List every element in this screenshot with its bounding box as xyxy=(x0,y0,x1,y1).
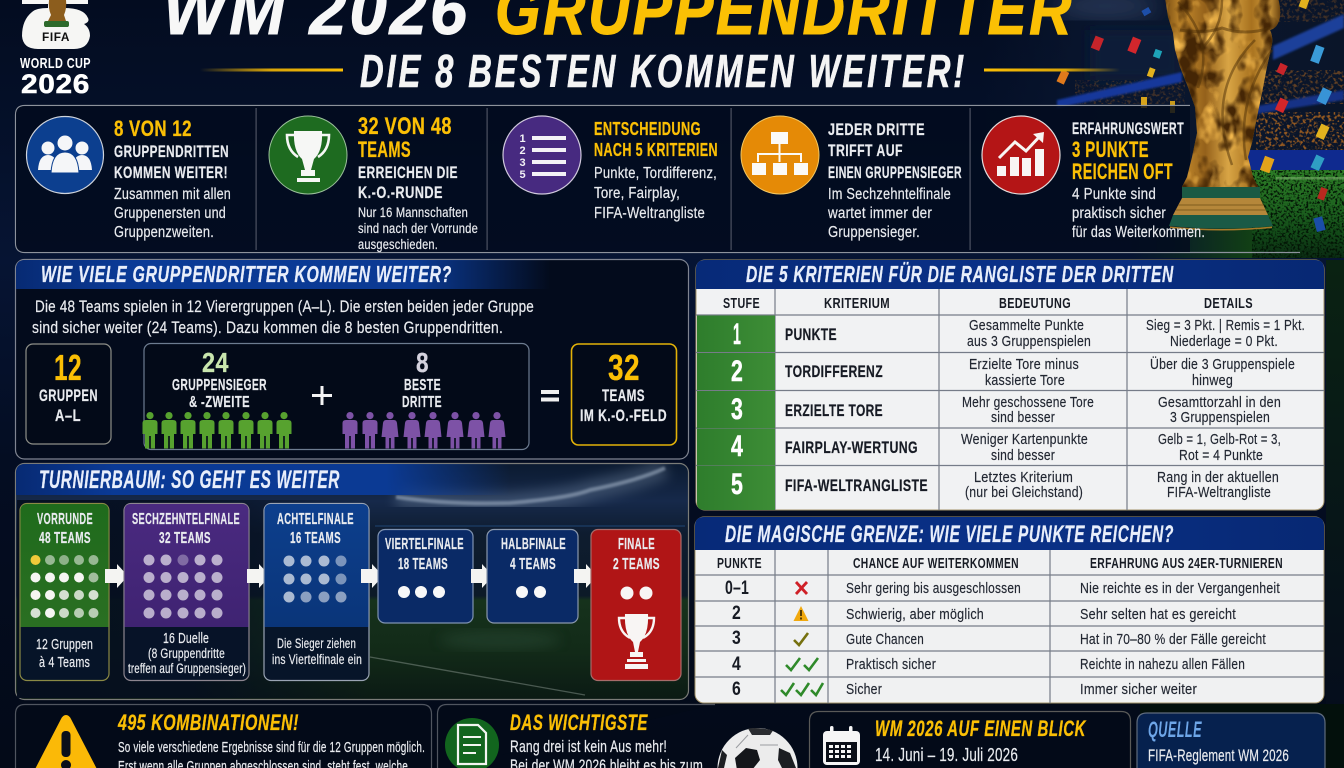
stage: Vorrunde: à 4 Teams xyxy=(39,655,90,671)
row 4: sind besser xyxy=(991,448,1055,464)
stage: Sechzehntelfinale: SECHZEHNTELFINALE xyxy=(132,511,240,528)
fact: Gruppensieger: Im Sechzehntelfinale xyxy=(828,186,951,203)
stat: 24 plus 8: 8 xyxy=(416,347,429,378)
row 1: Gesammelte Punkte xyxy=(969,318,1084,334)
stat: 32 teams: TEAMS xyxy=(602,387,645,405)
row 6: 6 xyxy=(732,679,741,700)
fact: Erfahrungswert: 3 PUNKTE xyxy=(1072,137,1149,162)
stage: Achtelfinale: 16 TEAMS xyxy=(290,530,341,547)
row 2: Schwierig, aber möglich xyxy=(846,607,984,623)
row 3: 3 xyxy=(732,628,741,649)
stat: 32 teams: IM K.-O.-FELD xyxy=(580,407,667,425)
stat: 32 teams: 32 xyxy=(608,347,640,388)
fact: 8 von 12: GRUPPENDRITTEN xyxy=(114,143,229,161)
icon: trophy xyxy=(619,614,654,669)
stage: Sechzehntelfinale: (8 Gruppendritte xyxy=(148,646,225,661)
plus sign xyxy=(312,386,332,405)
icon: purple team figures xyxy=(342,412,506,448)
stage: Viertelfinale xyxy=(378,530,473,623)
row 4 xyxy=(732,654,1245,675)
row 4: Reichte in nahezu allen Fällen xyxy=(1080,657,1245,673)
fact: 32 von 48: ERREICHEN DIE xyxy=(358,164,458,182)
panel: WM 2026 auf einen Blick xyxy=(810,712,1130,768)
fact: 32 von 48: K.-O.-RUNDE xyxy=(358,184,443,202)
fact: Gruppensieger: Gruppensieger. xyxy=(828,224,920,241)
row 4: FAIRPLAY-WERTUNG xyxy=(785,439,918,457)
row 1 xyxy=(697,316,1305,352)
table header xyxy=(723,296,1253,312)
table header: CHANCE AUF WEITERKOMMEN xyxy=(853,556,1019,572)
logo wordmark: FIFA xyxy=(42,30,70,44)
row 2: hinweg xyxy=(1192,373,1233,389)
fact: 8 von 12: 8 VON 12 xyxy=(114,116,192,141)
icon: three checks xyxy=(781,683,823,695)
row 0-1: 0–1 xyxy=(725,578,749,599)
stage: Vorrunde xyxy=(20,504,109,680)
row 5: Rang in der aktuellen xyxy=(1157,470,1279,486)
icon: FIFA World Cup logo xyxy=(20,0,91,99)
row 3: Mehr geschossene Tore xyxy=(962,395,1094,411)
fact: 5 Kriterien: Punkte, Tordifferenz, xyxy=(594,165,717,182)
stage: Finale xyxy=(591,530,681,680)
stat: 24 plus 8: DRITTE xyxy=(402,394,442,411)
fact: 8 von 12: KOMMEN WEITER! xyxy=(114,164,228,182)
fact: 8 von 12 xyxy=(26,116,231,241)
row 1: Niederlage = 0 Pkt. xyxy=(1170,334,1278,350)
stage: Finale: FINALE xyxy=(618,536,655,553)
panel: Das Wichtigste xyxy=(438,704,715,768)
team dots xyxy=(30,555,98,618)
row 4: 4 xyxy=(731,430,743,463)
stage: Halbfinale xyxy=(487,530,578,623)
row 2: 2 xyxy=(732,603,741,624)
arrow xyxy=(105,564,128,588)
row 4: 4 xyxy=(732,654,741,675)
icon: olive check xyxy=(794,633,808,645)
row 2 xyxy=(697,353,1295,390)
stadium lights xyxy=(17,468,685,698)
stage: Viertelfinale: 18 TEAMS xyxy=(398,556,448,573)
stage: Achtelfinale: Die Sieger ziehen xyxy=(277,636,356,651)
fact: 32 von 48 xyxy=(269,113,478,252)
icon: green team figures xyxy=(142,412,292,448)
row 3: ERZIELTE TORE xyxy=(785,402,883,420)
panel: Quelle: QUELLE xyxy=(1148,717,1202,742)
team dots xyxy=(284,556,346,602)
stat: 12 groups xyxy=(26,344,111,444)
row 3: 3 xyxy=(731,393,743,426)
row 3 xyxy=(697,391,1281,428)
row 1: aus 3 Gruppenspielen xyxy=(967,334,1091,350)
panel: 495 Kombinationen: 495 KOMBINATIONEN! xyxy=(117,710,299,735)
panel: key facts xyxy=(16,106,1300,252)
icon: calendar xyxy=(823,726,860,765)
stat: 12 groups: 12 xyxy=(54,347,82,388)
row 3: 3 Gruppenspielen xyxy=(1170,410,1270,426)
icon: two checks xyxy=(786,658,818,670)
fact: Gruppensieger: JEDER DRITTE xyxy=(828,121,925,139)
fact: Erfahrungswert: REICHEN OFT xyxy=(1072,159,1173,184)
fact: Gruppensieger: TRIFFT AUF xyxy=(828,142,903,160)
stage: Sechzehntelfinale: 16 Duelle xyxy=(163,631,209,647)
panel: magische Grenze table xyxy=(695,517,1324,703)
heading: WIE VIELE GRUPPENDRITTER KOMMEN WEITER? xyxy=(41,261,452,287)
row 3: Gesamttorzahl in den xyxy=(1158,395,1281,411)
stat: 24 plus 8: BESTE xyxy=(404,377,441,394)
row 3: sind besser xyxy=(991,410,1055,426)
row 2 xyxy=(732,603,1236,624)
icon: warning triangle xyxy=(32,715,100,768)
icon: rising chart xyxy=(982,116,1060,194)
fact: 32 von 48: Nur 16 Mannschaften xyxy=(358,205,468,220)
table header: PUNKTE xyxy=(717,556,762,572)
arrow xyxy=(574,564,597,588)
arrow xyxy=(247,564,270,588)
stage: Vorrunde: 48 TEAMS xyxy=(39,530,91,547)
icon: numbered list: 1 xyxy=(520,133,526,145)
stat: 24 plus 8: GRUPPENSIEGER xyxy=(172,377,267,394)
stage: Viertelfinale: VIERTELFINALE xyxy=(385,536,464,553)
row 1: PUNKTE xyxy=(785,326,837,344)
row 6 xyxy=(732,679,1197,700)
icon: numbered list xyxy=(503,116,581,194)
stat: 24 plus 8: 24 xyxy=(202,347,229,378)
icon: warning xyxy=(794,606,808,621)
fact: 32 von 48: 32 VON 48 xyxy=(358,113,452,140)
fact: 5 Kriterien: Tore, Fairplay, xyxy=(594,185,680,202)
fact text over trophy: für das Weiterkommen. xyxy=(1072,224,1205,241)
row 4: Gelb = 1, Gelb-Rot = 3, xyxy=(1158,432,1281,448)
stat: 32 teams xyxy=(572,344,676,445)
row 4 xyxy=(697,428,1281,466)
row 5: (nur bei Gleichstand) xyxy=(965,485,1083,501)
icon: group of people xyxy=(26,116,104,194)
row 1: Sieg = 3 Pkt. | Remis = 1 Pkt. xyxy=(1146,318,1305,334)
row 4: Praktisch sicher xyxy=(846,657,936,673)
stage: Halbfinale: HALBFINALE xyxy=(501,536,566,553)
panel: 495 Kombinationen xyxy=(16,704,432,768)
icon: numbered list: 3 xyxy=(520,157,526,169)
row 2: 2 xyxy=(731,355,743,388)
fact: Erfahrungswert xyxy=(982,116,1184,222)
panel: Quelle xyxy=(1137,713,1325,768)
panel: Das Wichtigste: Rang drei ist kein Aus mehr! xyxy=(510,738,667,756)
title xyxy=(163,0,1074,49)
intro text: sind sicher weiter (24 Teams). Dazu kommen die 8 besten Gruppendritten. xyxy=(32,319,503,337)
fact: Erfahrungswert: praktisch sicher xyxy=(1072,205,1166,222)
table header: STUFE xyxy=(723,296,760,312)
row 0-1: Nie reichte es in der Vergangenheit xyxy=(1080,581,1280,597)
fact: Gruppensieger xyxy=(741,116,962,241)
icon: World Cup trophy xyxy=(1165,0,1280,230)
panel: Turnierbaum xyxy=(16,464,688,700)
table header xyxy=(717,556,1283,572)
table header: DETAILS xyxy=(1204,296,1253,312)
fact: 8 von 12: Zusammen mit allen xyxy=(114,186,231,203)
panel: 5 Kriterien table xyxy=(696,260,1324,510)
fact: 5 Kriterien xyxy=(503,116,718,222)
stage: Achtelfinale: ins Viertelfinale ein xyxy=(272,652,362,667)
row 5: Letztes Kriterium xyxy=(974,470,1073,486)
icon: bracket tree xyxy=(741,116,819,194)
row 4: Weniger Kartenpunkte xyxy=(961,432,1088,448)
row 5: 5 xyxy=(731,468,743,501)
fact: 32 von 48: sind nach der Vorrunde xyxy=(358,221,478,236)
icon: numbered list: 2 xyxy=(520,145,526,157)
icon: FIFA World Cup logo: 2026 xyxy=(21,69,90,99)
stage: Sechzehntelfinale: treffen auf Gruppensieger) xyxy=(128,661,246,676)
fact: 32 von 48: TEAMS xyxy=(358,137,411,162)
row 5 xyxy=(697,466,1279,510)
row 4: Rot = 4 Punkte xyxy=(1179,448,1263,464)
fact: 8 von 12: Gruppenersten und xyxy=(114,205,226,222)
row 3: Gute Chancen xyxy=(846,632,924,648)
table header: KRITERIUM xyxy=(824,296,890,312)
fact: 5 Kriterien: FIFA-Weltrangliste xyxy=(594,205,705,222)
icon: FIFA World Cup logo: WORLD CUP xyxy=(20,55,91,72)
row 3: Hat in 70–80 % der Fälle gereicht xyxy=(1080,632,1266,648)
stage: Vorrunde: 12 Gruppen xyxy=(36,637,93,653)
icon: trophy xyxy=(269,116,347,194)
row 0-1 xyxy=(725,578,1280,599)
stage: Halbfinale: 4 TEAMS xyxy=(510,556,556,573)
panel: Das Wichtigste: DAS WICHTIGSTE xyxy=(510,710,648,735)
panel: wie viele Gruppendritter xyxy=(16,260,688,459)
row 1: 1 xyxy=(733,318,741,351)
fact: Gruppensieger: EINEN GRUPPENSIEGER xyxy=(828,164,962,182)
stat: 24 plus 8: & -ZWEITE xyxy=(189,394,250,411)
icon: football xyxy=(718,728,798,768)
stat: 12 groups: A–L xyxy=(55,407,81,425)
arrow xyxy=(361,564,383,588)
row 2: Sehr selten hat es gereicht xyxy=(1080,607,1236,623)
arrow xyxy=(471,564,493,588)
row 5: FIFA-WELTRANGLISTE xyxy=(785,477,928,495)
row 0-1: Sehr gering bis ausgeschlossen xyxy=(846,581,1021,597)
fact: Erfahrungswert: 4 Punkte sind xyxy=(1072,186,1156,203)
intro text xyxy=(32,298,534,337)
fact: Erfahrungswert: ERFAHRUNGSWERT xyxy=(1072,120,1184,138)
stage: Finale: 2 TEAMS xyxy=(613,556,660,573)
heading: TURNIERBAUM: SO GEHT ES WEITER xyxy=(39,466,340,494)
equals sign xyxy=(541,390,559,402)
fact: Gruppensieger: wartet immer der xyxy=(827,205,932,222)
stage: Vorrunde: VORRUNDE xyxy=(37,511,93,528)
icon: document xyxy=(445,718,499,768)
confetti xyxy=(1057,0,1332,232)
stage: Sechzehntelfinale xyxy=(124,504,249,680)
stage: Sechzehntelfinale: 32 TEAMS xyxy=(159,530,211,547)
stage: Achtelfinale: ACHTELFINALE xyxy=(277,511,354,528)
fact: 32 von 48: ausgeschieden. xyxy=(358,237,438,252)
stage: Achtelfinale xyxy=(264,504,369,680)
fact: 8 von 12: Gruppenzweiten. xyxy=(114,224,214,241)
panel: WM 2026 auf einen Blick: WM 2026 AUF EINEN BLICK xyxy=(875,716,1087,741)
stadium backdrop xyxy=(980,0,1344,768)
fact: 5 Kriterien: NACH 5 KRITERIEN xyxy=(594,140,718,160)
row 2: Erzielte Tore minus xyxy=(969,357,1079,373)
team dots xyxy=(144,554,222,618)
row 5: FIFA-Weltrangliste xyxy=(1167,485,1271,501)
row 2: TORDIFFERENZ xyxy=(785,363,883,381)
table header: BEDEUTUNG xyxy=(999,296,1071,312)
intro text: Die 48 Teams spielen in 12 Vierergruppen (A–L). Die ersten beiden jeder Gruppe xyxy=(35,298,534,316)
fact: 5 Kriterien: ENTSCHEIDUNG xyxy=(594,119,701,139)
subtitle: DIE 8 BESTEN KOMMEN WEITER! xyxy=(360,45,967,97)
row 3 xyxy=(732,628,1266,649)
panel: 495 Kombinationen: So viele verschiedene Ergebnisse sind für die 12 Gruppen möglich. xyxy=(118,740,425,756)
row 2: Über die 3 Gruppenspiele xyxy=(1150,355,1295,373)
stat: 12 groups: GRUPPEN xyxy=(39,387,98,405)
panel: Quelle: FIFA-Reglement WM 2026 xyxy=(1148,747,1289,765)
stat: 24 plus 8 xyxy=(142,344,529,450)
icon: red cross xyxy=(796,582,807,594)
row 2: kassierte Tore xyxy=(985,373,1065,389)
panel: WM 2026 auf einen Blick: 14. Juni – 19. Juli 2026 xyxy=(875,745,1018,765)
row 6: Sicher xyxy=(846,682,882,698)
icon: numbered list: 5 xyxy=(520,169,526,181)
row 6: Immer sicher weiter xyxy=(1080,682,1197,698)
